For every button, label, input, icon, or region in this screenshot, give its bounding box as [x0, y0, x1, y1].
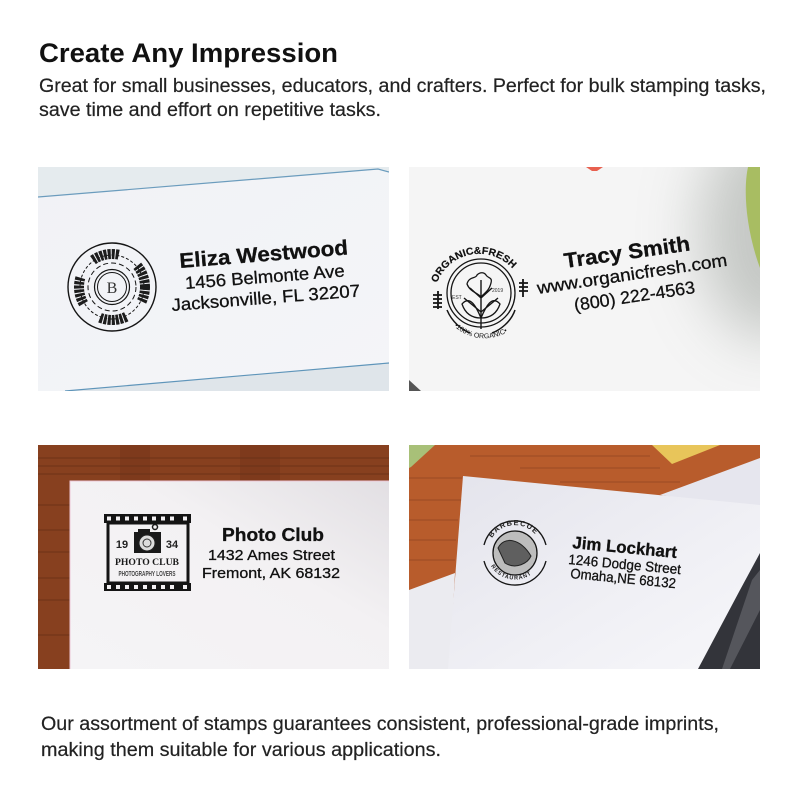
- icon: monogram wreath stamp: [68, 243, 156, 331]
- address: Tracy Smith: (800) 222-4563: [573, 277, 696, 315]
- icon: organic leaf stamp: 2019: [492, 288, 503, 294]
- address: Tracy Smith: [535, 233, 728, 315]
- closing text: Our assortment of stamps guarantees consistent, professional-grade imprints,: [41, 714, 719, 735]
- address: Jim Lockhart: 1246 Dodge Street: [568, 551, 682, 577]
- address: Eliza Westwood: [171, 237, 361, 315]
- panel: Tracy Smith card: [409, 167, 760, 391]
- icon: film strip camera stamp: 34: [166, 539, 179, 551]
- address: Jim Lockhart: Omaha,NE 68132: [570, 565, 677, 591]
- address: Photo Club: Fremont, AK 68132: [202, 566, 340, 582]
- closing text: making them suitable for various applications.: [41, 740, 441, 761]
- intro text: [39, 76, 766, 121]
- address: Photo Club: 1432 Ames Street: [208, 548, 335, 564]
- address: Eliza Westwood: Jacksonville, FL 32207: [171, 281, 361, 315]
- address: Tracy Smith: Tracy Smith: [562, 233, 691, 273]
- icon: organic leaf stamp: [432, 246, 528, 338]
- intro text: Great for small businesses, educators, and crafters. Perfect for bulk stamping tasks,: [39, 76, 766, 97]
- icon: monogram wreath stamp: B: [107, 280, 117, 297]
- address: Jim Lockhart: [568, 536, 682, 588]
- address: Tracy Smith: www.organicfresh.com: [535, 250, 728, 298]
- icon: film strip camera stamp: [104, 514, 191, 591]
- address: Jim Lockhart: Jim Lockhart: [572, 533, 678, 562]
- intro text: save time and effort on repetitive tasks.: [39, 100, 381, 121]
- icon: barbecue restaurant stamp: BARBECUE: [488, 520, 538, 538]
- icon: barbecue restaurant stamp: [483, 520, 547, 586]
- icon: organic leaf stamp: •100% ORGANIC•: [456, 324, 506, 338]
- panel: Photo Club letterhead: [38, 445, 389, 669]
- address: Eliza Westwood: Eliza Westwood: [179, 237, 349, 273]
- title: Create Any Impression: [39, 38, 338, 68]
- closing text: [41, 714, 719, 761]
- icon: film strip camera stamp: PHOTOGRAPHY LOVERS: [118, 569, 176, 578]
- icon: organic leaf stamp: ORGANIC&FRESH: [432, 246, 517, 282]
- icon: film strip camera stamp: 19: [116, 539, 128, 551]
- icon: barbecue restaurant stamp: RESTAURANT: [491, 564, 530, 580]
- panel: Jim Lockhart letter: [409, 445, 760, 669]
- address: Photo Club: Photo Club: [222, 525, 324, 545]
- icon: film strip camera stamp: PHOTO CLUB: [115, 558, 180, 568]
- address: Eliza Westwood: 1456 Belmonte Ave: [184, 260, 345, 293]
- address: Photo Club: [202, 525, 340, 582]
- icon: organic leaf stamp: EST: [452, 295, 462, 301]
- panel: Eliza Westwood envelope: [38, 167, 389, 391]
